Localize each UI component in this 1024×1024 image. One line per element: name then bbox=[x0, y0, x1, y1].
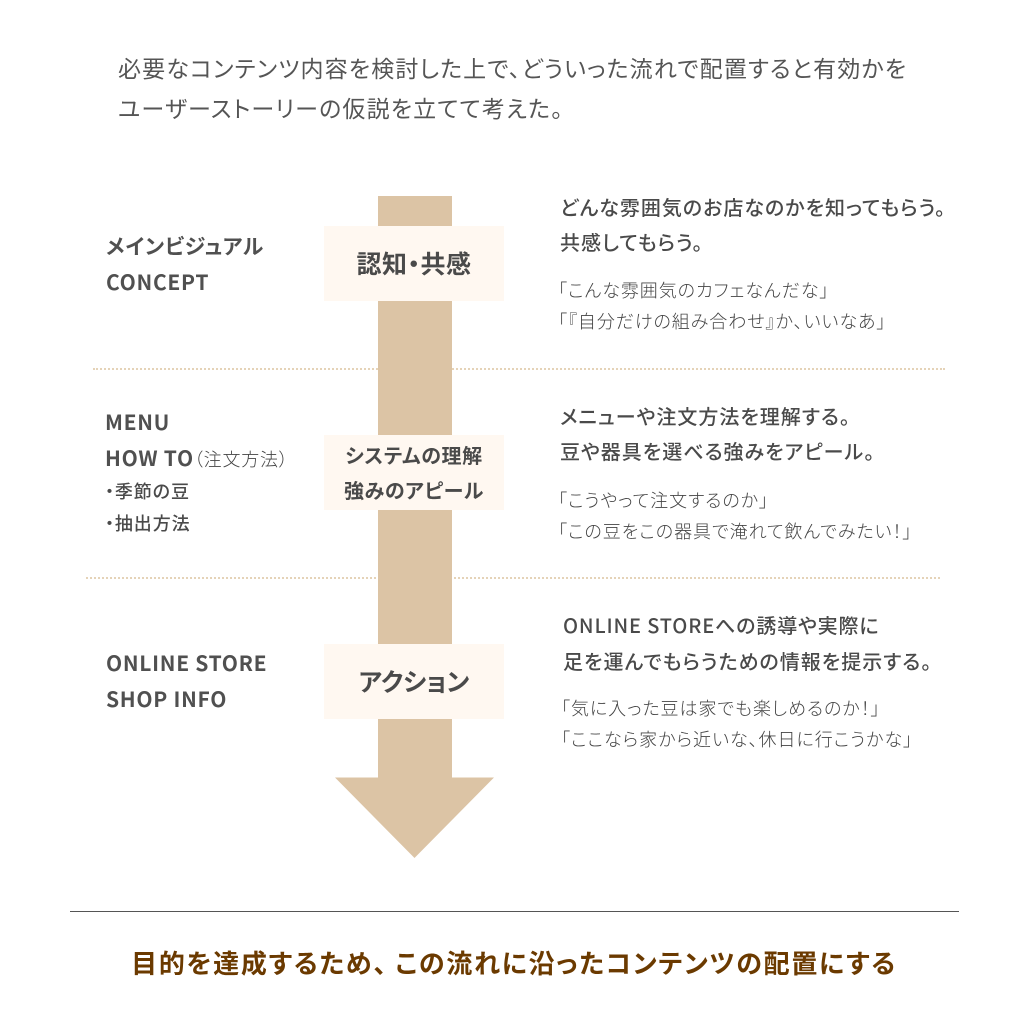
left labels: section 2: MENU bbox=[105, 407, 170, 437]
lead text: 必要なコンテンツ内容を検討した上で、どういった流れで配置すると有効かを bbox=[118, 50, 907, 84]
right text: section 2: 「この豆をこの器具で淹れて飲んでみたい！」 bbox=[558, 518, 912, 544]
right text: section 2: 豆や器具を選べる強みをアピール。 bbox=[560, 436, 875, 465]
conclusion heading: 目的を達成するため、この流れに沿ったコンテンツの配置にする bbox=[131, 944, 897, 981]
right text: section 3 bbox=[561, 610, 932, 752]
stage box: action: アクション bbox=[359, 663, 469, 699]
right text: section 2: 「こうやって注文するのか」 bbox=[558, 487, 769, 513]
flow arrow bbox=[335, 196, 494, 858]
left labels: section 1: CONCEPT bbox=[106, 267, 209, 297]
right text: section 1: どんな雰囲気のお店なのかを知ってもらう。 bbox=[560, 192, 946, 221]
left labels: section 3 bbox=[106, 648, 267, 714]
stage box: system understanding: 強みのアピール bbox=[344, 475, 484, 504]
right text: section 1: 「こんな雰囲気のカフェなんだな」 bbox=[558, 277, 829, 303]
left labels: section 3: SHOP INFO bbox=[106, 684, 227, 714]
lead text bbox=[118, 50, 907, 124]
left labels: section 2: HOW TO（注文方法） bbox=[105, 443, 289, 473]
stage box: awareness bbox=[324, 226, 504, 301]
right text: section 2: メニューや注文方法を理解する。 bbox=[560, 401, 851, 430]
left labels: section 3: ONLINE STORE bbox=[106, 648, 267, 678]
right text: section 1: 「『自分だけの組み合わせ』か、いいなあ」 bbox=[558, 308, 886, 334]
right text: section 3: 「ここなら家から近いな、休日に行こうかな」 bbox=[561, 726, 913, 752]
stage box: system understanding bbox=[324, 435, 504, 510]
stage box: awareness: 認知・共感 bbox=[356, 245, 472, 281]
right text: section 3: ONLINE STOREへの誘導や実際に bbox=[563, 610, 879, 639]
stage box: system understanding: システムの理解 bbox=[345, 440, 483, 469]
lead text: ユーザーストーリーの仮説を立てて考えた。 bbox=[118, 90, 564, 124]
right text: section 3: 足を運んでもらうための情報を提示する。 bbox=[563, 646, 932, 675]
right text: section 1: 共感してもらう。 bbox=[560, 227, 703, 256]
left labels: section 1: メインビジュアル bbox=[106, 231, 264, 261]
right text: section 2 bbox=[558, 401, 912, 544]
right text: section 3: 「気に入った豆は家でも楽しめるのか！」 bbox=[561, 695, 881, 721]
right text: section 1 bbox=[558, 192, 946, 334]
left labels: section 2: ・季節の豆 bbox=[105, 478, 190, 504]
stage box: action bbox=[324, 644, 504, 719]
left labels: section 2 bbox=[105, 407, 289, 536]
left labels: section 1 bbox=[106, 231, 264, 297]
left labels: section 2: ・抽出方法 bbox=[105, 510, 190, 536]
